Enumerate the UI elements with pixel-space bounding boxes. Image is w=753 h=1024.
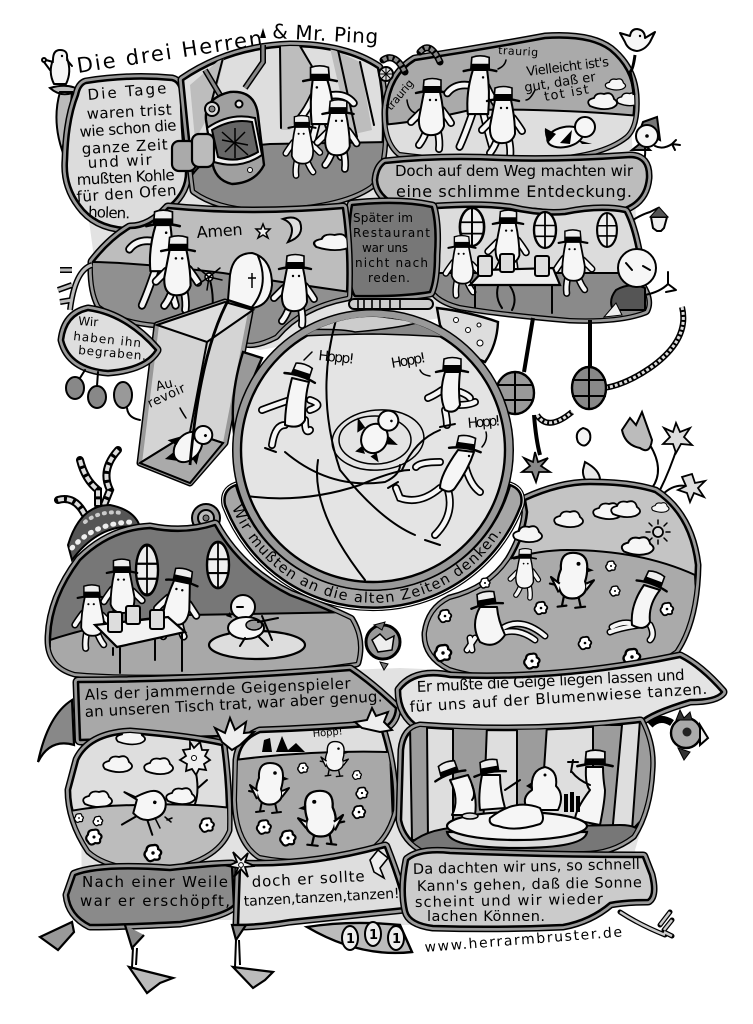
panel: caption da dachten: lachen Können. [427, 909, 545, 925]
gap fill: lower structure [80, 668, 680, 925]
panel: caption als der: an unseren Tisch trat, war aber genug. [84, 687, 383, 721]
panel: spaeter text: Später im [353, 211, 413, 225]
gap fill: upper structure [72, 70, 640, 350]
figure: seated man right [152, 565, 205, 642]
text: die tage: holen. [88, 203, 130, 222]
wing left [38, 700, 74, 762]
speech: hopp [304, 348, 501, 447]
icon: gnome [632, 117, 680, 168]
speech: traurig labels: Vielleicht ist's [526, 55, 610, 80]
icon: central gear disk [366, 622, 400, 670]
icon: rooster head [650, 710, 708, 760]
icon: duck foot left [125, 925, 173, 993]
speech: traurig labels: tot ist [543, 82, 590, 105]
panel: open grave: revoir [145, 381, 189, 412]
icon: top right bird [620, 29, 655, 95]
speech: hopp: Hopp! [318, 348, 355, 368]
title: Die drei Herren [75, 26, 264, 78]
icon: sun [646, 520, 670, 544]
panel: open grave: Au [154, 376, 174, 395]
meadow flowers [435, 561, 673, 669]
panel: big skating circle [220, 310, 525, 612]
panel: wir haben ihn begraben [63, 310, 156, 371]
panel: dance on scene: Hopp! [312, 726, 343, 740]
figure: mourner [156, 236, 198, 310]
figure: short man [286, 116, 320, 175]
panel: caption als der [78, 670, 396, 740]
icon: top-left bird on perch [42, 50, 82, 150]
panel: dining [400, 720, 660, 860]
text: die tage [76, 79, 177, 222]
panel: open grave [140, 253, 272, 483]
figure: bald man [604, 249, 676, 317]
speech: traurig labels: gut, daß er [523, 70, 597, 96]
text: die tage: ganze Zeit [81, 136, 168, 158]
text: die tage: für den Ofen [76, 181, 177, 206]
panel: die tage text [67, 79, 186, 228]
panel: caption doch: Doch auf dem Weg machten wir [395, 162, 634, 180]
icon: tail bottom left [40, 922, 74, 950]
text: die tage: und wir [87, 151, 153, 172]
website url: www.herrarmbruster.de [424, 925, 623, 956]
panel: caption doch er sollte: doch er sollte [251, 867, 365, 891]
figure: skater left [262, 359, 319, 452]
figure: dancing man C [610, 567, 672, 640]
flowers [257, 763, 368, 846]
panel: spaeter text: reden. [368, 271, 410, 285]
icon: moon [283, 218, 301, 242]
icon: sunflower [180, 742, 210, 804]
panel: spaeter text: war uns [362, 241, 408, 255]
panel: caption er musste: Er mußte die Geige liegen lassen und [416, 666, 685, 696]
text: die tage: Die Tage [87, 79, 167, 104]
panel: amen burial [90, 208, 352, 350]
panel: exhausted chick scene [65, 730, 232, 875]
title [75, 19, 379, 78]
icon: gravestone [228, 253, 272, 308]
figure: seated man left [75, 585, 111, 648]
figure: skating penguin [344, 399, 410, 467]
icon: dead penguin [545, 117, 595, 151]
figure: left diner [446, 236, 480, 295]
panel: caption da dachten: Da dachten wir uns, so schnell [413, 857, 640, 878]
panel: spaeter text: Restaurant [353, 226, 430, 240]
figure: mourner right of grave [274, 254, 314, 325]
panel: caption er musste: für uns auf der Blumenwiese tanzen. [409, 680, 708, 716]
panel: oven room [172, 28, 390, 215]
table and pig [447, 792, 587, 848]
figure: skater top right [428, 358, 475, 427]
swirl decor [192, 504, 220, 532]
speech: traurig labels [383, 44, 610, 113]
text: die tage: wie schon die [79, 116, 177, 141]
meadow flowers [74, 814, 214, 861]
panel: spaeter text [349, 203, 436, 296]
figure: tall mourner [129, 210, 184, 305]
chicks dancing [249, 763, 289, 813]
panel: caption nach einer weile: Nach einer Weile [82, 873, 228, 891]
figure: dancing man B [510, 549, 538, 598]
icon: penguin in grave [157, 413, 220, 477]
speech: hopp: Hopp! [467, 413, 501, 432]
speech: traurig labels: traurig [383, 77, 416, 113]
figure: seated man middle [104, 559, 142, 626]
icon: wheel and worm tube [379, 48, 440, 81]
icon: oven robot [172, 28, 266, 184]
speech: hopp: Hopp! [390, 350, 427, 372]
figure: diner hat tilted [430, 757, 476, 815]
ribbon [224, 485, 522, 608]
panel: caption als der: Als der jammernde Geigenspieler [84, 674, 352, 704]
panel: wir haben ihn begraben: Wir [78, 314, 99, 329]
panel: 111 band: 1 [369, 928, 378, 943]
ribbon text: Wir mußten an die alten Zeiten denken. [233, 504, 501, 603]
panel: caption doch er sollte [228, 847, 405, 925]
icon: flowers top right [622, 412, 705, 502]
panel: amen burial: Amen [196, 220, 243, 242]
text: die tage: mußten Kohle [76, 166, 175, 189]
barrels with cables and rope [496, 307, 683, 455]
panel: wir haben ihn begraben: haben ihn [73, 329, 142, 350]
figure: third man [317, 100, 357, 169]
panel: caption doch: eine schlimme Entdeckung. [396, 182, 632, 201]
panel: caption er musste [400, 657, 722, 730]
table with mugs [95, 606, 185, 673]
icon: dandelion [197, 268, 222, 318]
panel: 111 band: 1 [392, 932, 401, 947]
speech: traurig labels: traurig [498, 44, 538, 59]
title: & Mr. Ping [272, 19, 379, 49]
figure: mourner tall [447, 56, 500, 147]
figure: skater lower right [388, 433, 483, 545]
figure: right diner [556, 230, 592, 293]
small strip between grave and circle [233, 352, 262, 440]
figure: dancing chick [550, 553, 594, 608]
panel: bar room [50, 525, 360, 680]
text: die tage: waren trist [86, 101, 172, 123]
figure: dancing man A [467, 589, 545, 650]
panel: 111 band: 1 [346, 932, 355, 947]
panel: caption da dachten: Kann's gehen, daß die Sonne [417, 875, 642, 895]
panel: caption nach einer weile: war er erschöpft, [80, 892, 230, 910]
panel: dance on scene [235, 725, 395, 870]
figure: tired chick [116, 783, 169, 836]
panel: wir haben ihn begraben: begraben. [78, 343, 147, 363]
icon: branch left [58, 265, 92, 310]
table with mugs [470, 254, 560, 313]
icon: duck foot right [232, 925, 273, 988]
icon: worms and mesh [58, 450, 140, 560]
figure: mourner left [411, 78, 451, 149]
figure: centre diner [488, 210, 526, 277]
panel: 111 band [307, 922, 412, 953]
panel: top right scene [379, 38, 640, 165]
icon: lantern [630, 207, 668, 231]
panel: caption doch er sollte: tanzen,tanzen,tanzen! [243, 886, 400, 910]
icon: star [256, 224, 270, 238]
tube beneath spaeter panel [349, 299, 433, 309]
dotted blob [437, 308, 498, 362]
icons: seed pods [66, 370, 140, 420]
panel: caption doch [377, 157, 647, 212]
panel: caption da dachten [405, 852, 652, 927]
rug [209, 631, 305, 659]
icons: hanging star and falling clouds [522, 428, 600, 490]
figure: mourner right [482, 86, 522, 157]
panel: meadow [420, 484, 700, 680]
panel: spaeter text: nicht nach [355, 256, 428, 270]
burst decorations [215, 708, 392, 750]
figure: tall man [299, 66, 354, 157]
icon: butterfly [370, 850, 388, 878]
icon: claw foot right [620, 912, 672, 936]
figure: chick diner [525, 767, 561, 810]
icon: small spiky flower [228, 852, 255, 877]
panel: caption nach einer weile [68, 865, 234, 925]
panel: restaurant [425, 207, 676, 323]
panel: caption da dachten: scheint und wir wieder [415, 892, 603, 911]
figure: diner centre [472, 757, 520, 810]
figure: diner standing right [568, 750, 613, 825]
figure: chick violinist [226, 595, 278, 646]
